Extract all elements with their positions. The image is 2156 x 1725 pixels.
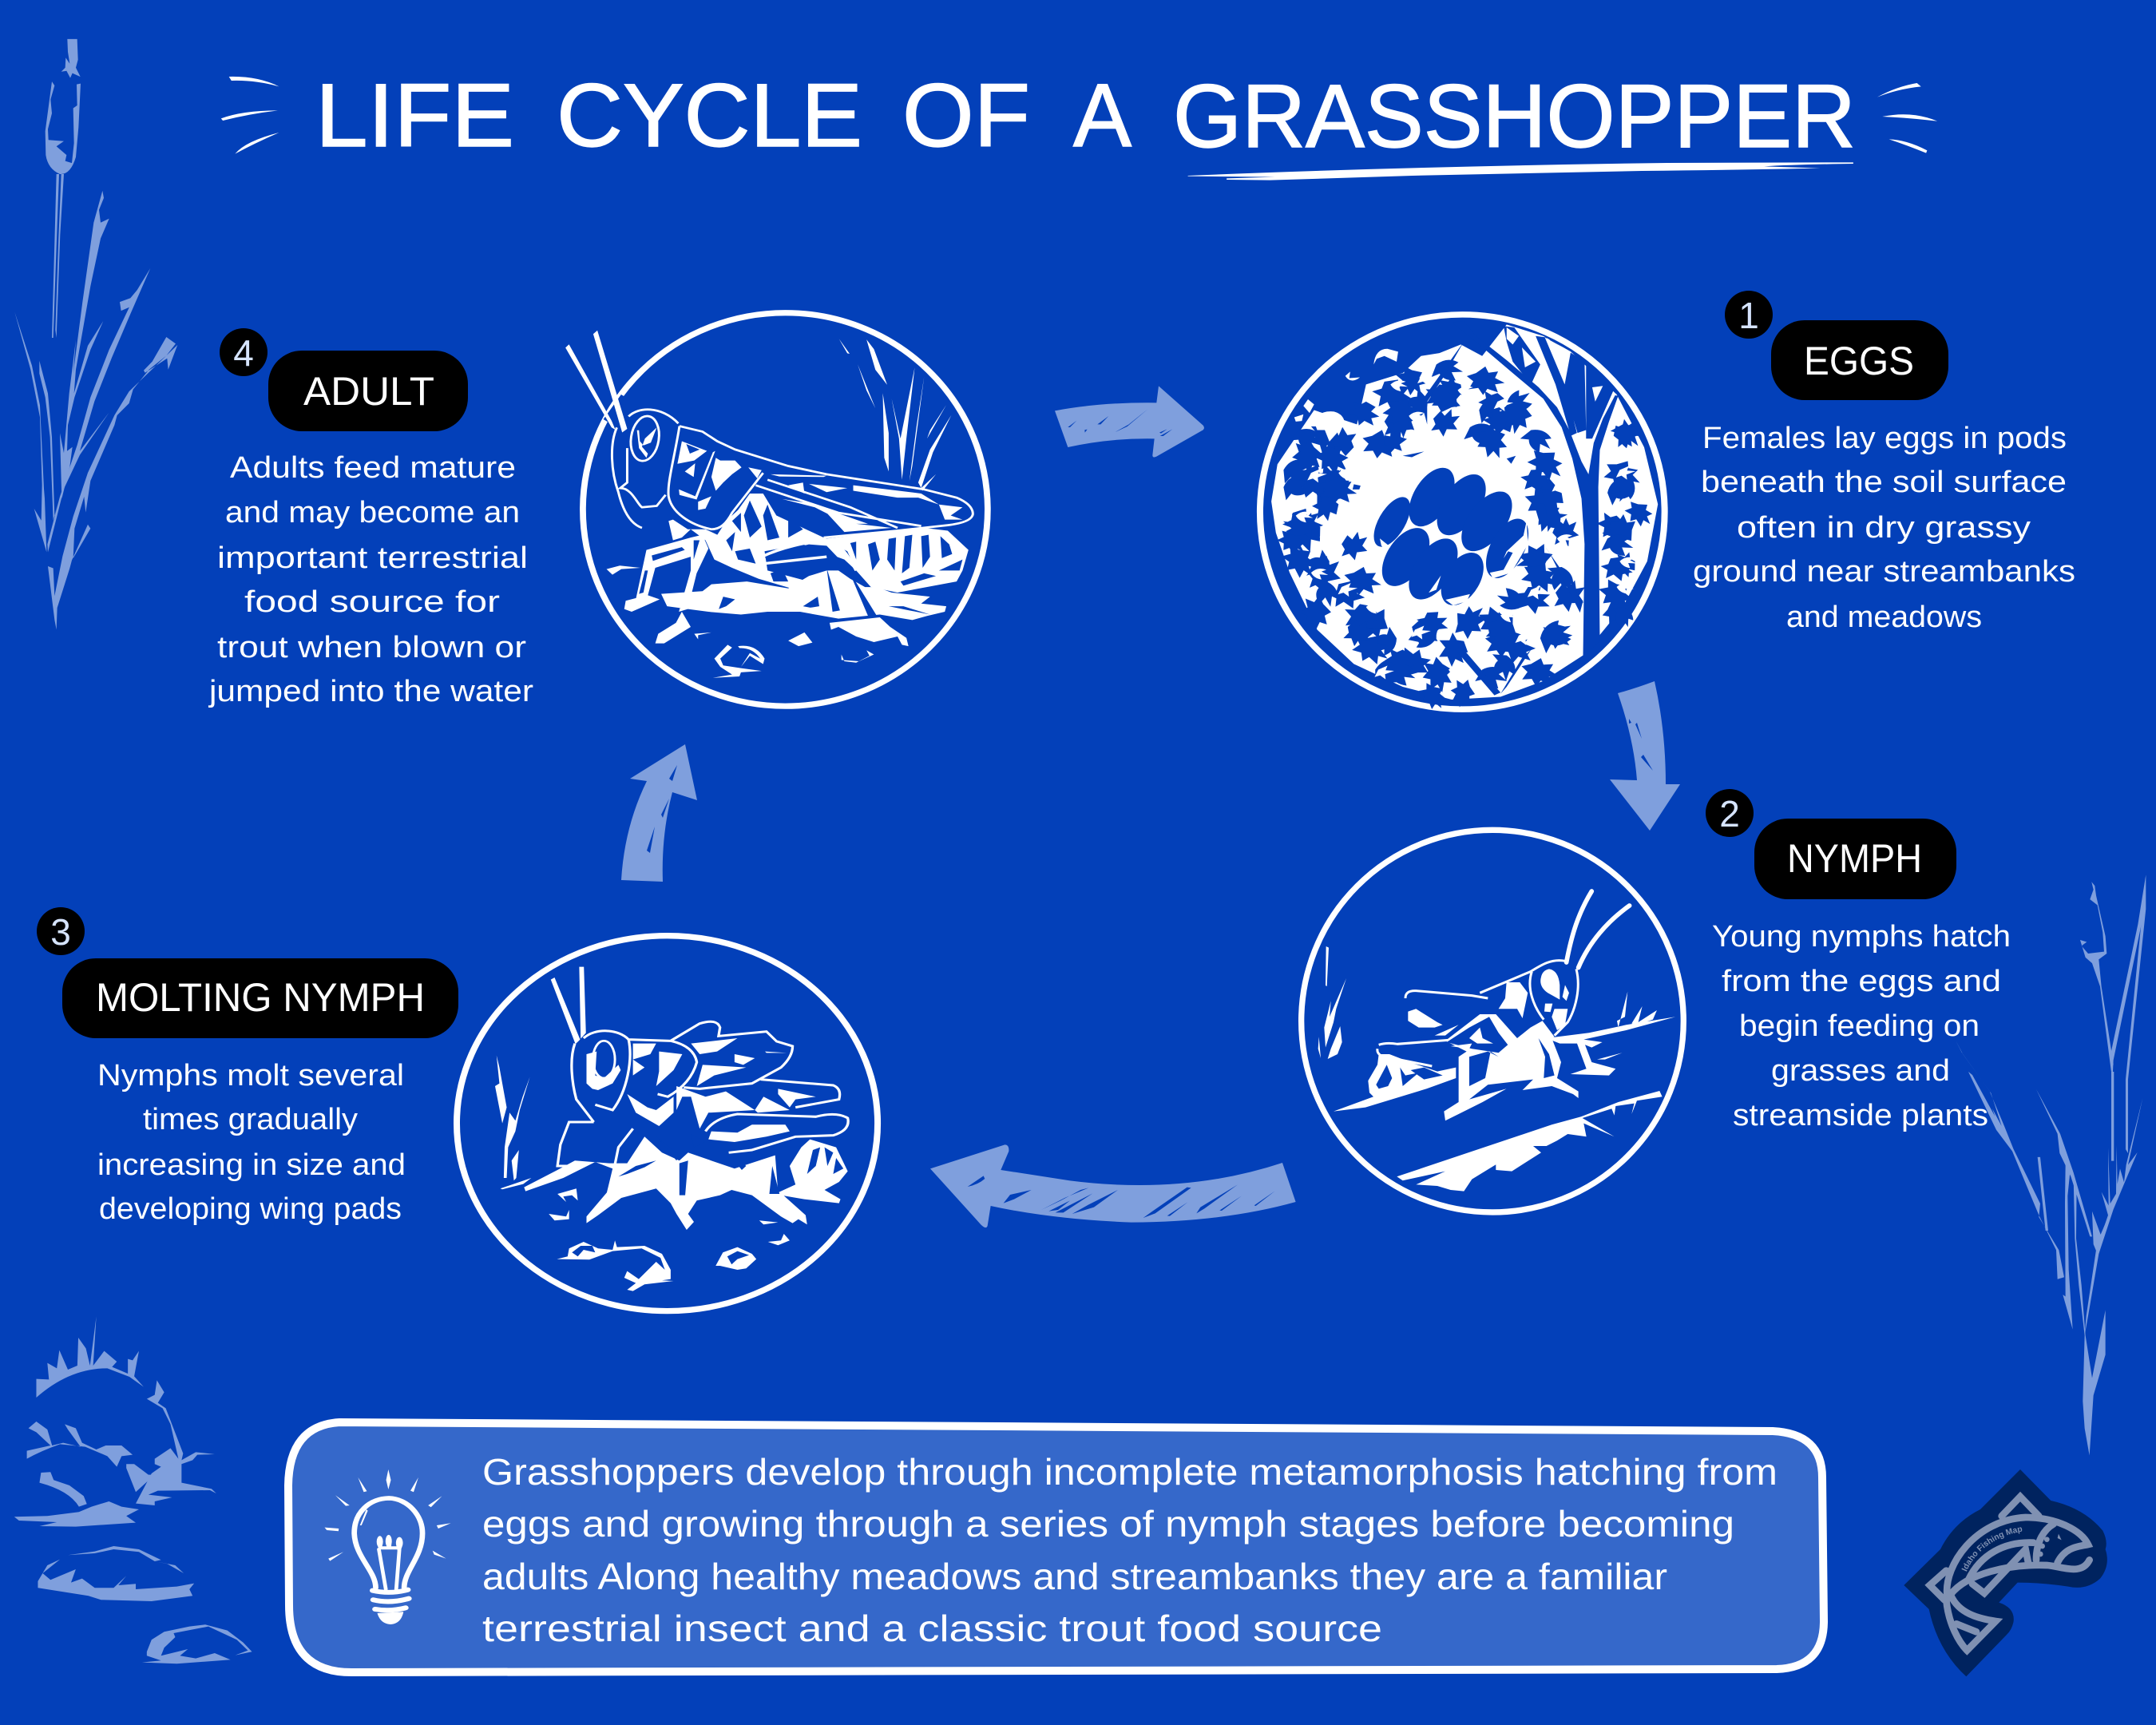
ground shadow <box>661 570 946 620</box>
panel frame <box>288 1422 1824 1672</box>
description: beneath the soil surface <box>1701 466 2067 499</box>
title words: A <box>1073 65 1132 165</box>
callout text <box>482 1451 1778 1649</box>
hind leg and twig <box>1547 992 1675 1076</box>
number badge <box>1706 789 1754 837</box>
arrow: molting nymph to adult <box>621 744 697 882</box>
number badge <box>1725 291 1773 339</box>
hind tarsus <box>830 617 909 646</box>
number badge: 3 <box>50 911 71 953</box>
femur <box>765 545 838 564</box>
ground stones <box>549 1188 790 1291</box>
abdomen <box>824 528 969 593</box>
arrow: nymph to molting nymph <box>930 1144 1296 1227</box>
title words: GRASSHOPPER <box>1173 66 1856 166</box>
logo: Idaho Fishing Map <box>1904 1469 2107 1677</box>
blue body gaps <box>1376 1017 1555 1089</box>
wing patches <box>771 474 962 532</box>
tree <box>1452 321 1618 658</box>
description: and meadows <box>1786 601 1982 634</box>
body outline <box>1377 961 1578 1066</box>
stage 1: eggs illustration <box>1260 315 1665 714</box>
grass on left <box>1318 946 1346 1059</box>
plants on left <box>495 1056 531 1189</box>
title words <box>315 65 1856 166</box>
stage 3: molting nymph label <box>37 907 458 1226</box>
body outline <box>572 1021 848 1152</box>
arrow: eggs to nymph <box>1610 681 1680 831</box>
description: from the eggs and <box>1722 965 2001 998</box>
title words: CYCLE <box>557 65 862 165</box>
grass <box>839 339 951 491</box>
description: Young nymphs hatch <box>1712 920 2011 954</box>
wing marks <box>1435 1025 1493 1049</box>
description <box>97 1059 406 1226</box>
description: ground near streambanks <box>1693 555 2075 589</box>
icon: light bulb <box>324 1469 451 1624</box>
pill heading: NYMPH <box>1787 836 1922 881</box>
callout text: adults Along healthy meadows and streambanks they are a familiar <box>482 1556 1667 1597</box>
description: increasing in size and <box>97 1148 406 1182</box>
decoration: rocks left <box>14 1316 252 1664</box>
logo fish lines <box>1930 1497 2090 1651</box>
description: jumped into the water <box>208 675 533 708</box>
front legs <box>624 535 708 612</box>
description: food source for <box>244 585 500 619</box>
description: trout when blown or <box>217 631 526 664</box>
description: Nymphs molt several <box>97 1059 404 1092</box>
description <box>208 451 533 708</box>
lower branch <box>1397 1091 1663 1192</box>
description <box>1712 920 2011 1132</box>
decoration: cattail plant left <box>14 39 177 630</box>
description: begin feeding on <box>1739 1009 1980 1043</box>
pill heading: EGGS <box>1804 339 1914 383</box>
antennae <box>551 967 586 1044</box>
eye and thorax patches <box>637 427 762 510</box>
logo text: Idaho Fishing Map <box>1961 1527 2022 1572</box>
description: times gradually <box>143 1103 358 1136</box>
logo silhouette <box>1904 1469 2107 1676</box>
description: developing wing pads <box>99 1192 402 1226</box>
stage 2: nymph label <box>1706 789 2011 1132</box>
pill heading <box>1771 320 1948 400</box>
title ornament left <box>221 77 279 154</box>
number badge <box>220 328 268 376</box>
bulb rays <box>324 1469 451 1561</box>
description: Females lay eggs in pods <box>1702 422 2067 455</box>
title <box>221 65 1937 180</box>
number badge: 2 <box>1719 793 1740 835</box>
description: often in dry grassy <box>1737 511 2031 545</box>
body patches <box>1408 969 1569 1030</box>
title words: LIFE <box>315 65 514 165</box>
stones <box>694 632 874 678</box>
mid body <box>668 494 856 589</box>
lower body <box>524 1136 848 1230</box>
description: streamside plants <box>1733 1099 1988 1132</box>
callout text: terrestrial insect and a classic trout food source <box>482 1608 1382 1649</box>
title words: OF <box>902 65 1030 165</box>
stage 3: molting nymph illustration <box>457 936 878 1311</box>
antennae <box>565 331 627 433</box>
callout panel <box>288 1422 1824 1672</box>
egg pod <box>1366 461 1537 612</box>
body outline <box>612 410 973 537</box>
number badge: 1 <box>1738 295 1759 336</box>
stage 2: nymph illustration <box>1302 830 1683 1212</box>
callout text: Grasshoppers develop through incomplete metamorphosis hatching from <box>482 1451 1778 1493</box>
pill heading <box>268 351 468 431</box>
callout text: eggs and growing through a series of nymph stages before becoming <box>482 1503 1734 1545</box>
description: grasses and <box>1771 1054 1950 1088</box>
number badge <box>37 907 85 955</box>
pill heading <box>1754 819 1956 899</box>
decoration: grass plant right <box>1956 875 2146 1456</box>
description: and may become an <box>225 496 520 529</box>
front legs <box>557 1122 633 1190</box>
description: important terrestrial <box>217 541 528 575</box>
antennae <box>1567 891 1630 968</box>
description: Adults feed mature <box>230 451 516 485</box>
number badge: 4 <box>233 332 254 374</box>
body patches <box>586 1038 816 1126</box>
description <box>1693 422 2075 634</box>
title underline and ornament right <box>1187 83 1937 180</box>
stage 4: adult illustration <box>565 313 988 706</box>
stage 4: adult label <box>208 328 533 708</box>
stage 1: eggs label <box>1693 291 2075 634</box>
pill heading: MOLTING NYMPH <box>96 975 425 1020</box>
foliage <box>1272 321 1659 714</box>
arrow: adult to eggs <box>1055 386 1204 458</box>
pill heading <box>62 958 458 1038</box>
white leaf details over foliage <box>1294 327 1651 680</box>
soil and foliage base <box>1271 324 1658 700</box>
pill heading: ADULT <box>303 369 434 414</box>
